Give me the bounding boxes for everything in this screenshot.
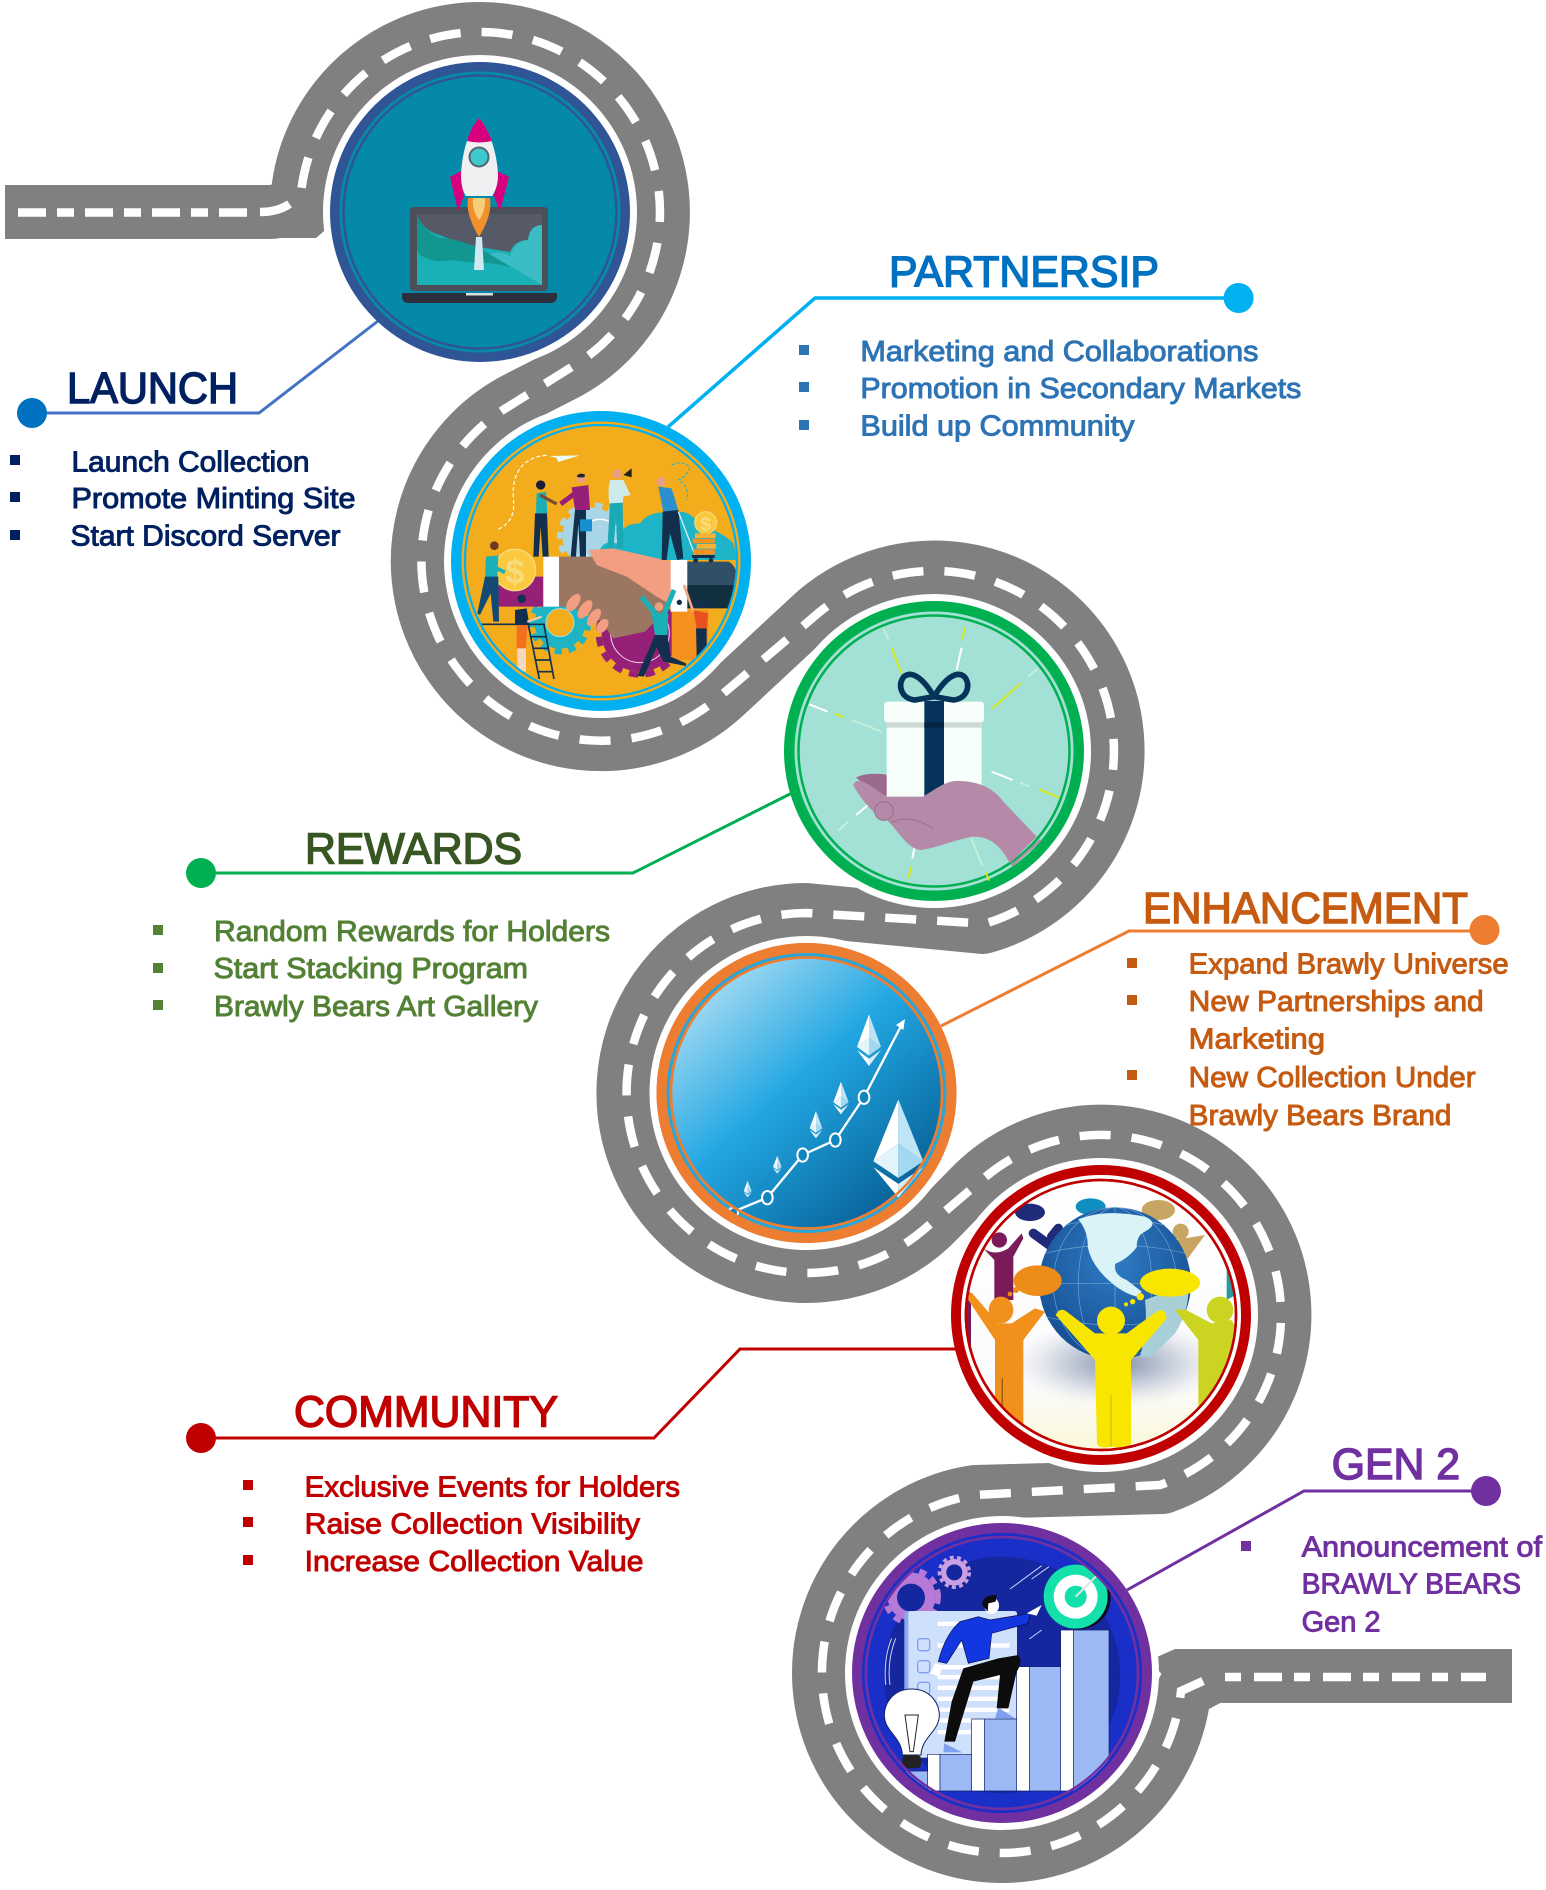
- back person tan: [1173, 1224, 1205, 1260]
- back person purple: [983, 1232, 1023, 1300]
- fingers: [566, 594, 608, 634]
- left coin: [494, 549, 536, 591]
- illustration: chart line and diamonds: [729, 1014, 923, 1217]
- marker dot: [186, 858, 216, 888]
- salmon hand: [588, 548, 672, 605]
- orange person: [965, 1293, 1045, 1427]
- connector line: rewards: [216, 793, 792, 873]
- chart line: [733, 1027, 901, 1212]
- illustration: gift and hand: [809, 627, 1059, 881]
- panel: gen 2: [1241, 1440, 1543, 1639]
- bars: [902, 1630, 1109, 1791]
- heading: gen 2: GEN 2: [1332, 1440, 1460, 1489]
- icon: rocket: [450, 118, 509, 270]
- hand: [853, 781, 1037, 863]
- heading: enhancement: ENHANCEMENT: [1143, 884, 1468, 933]
- bullet list: Build up Community: [860, 411, 1135, 443]
- document: [904, 1611, 1017, 1758]
- panel: enhancement: [1127, 884, 1509, 1132]
- panel: rewards: [153, 824, 610, 1023]
- cuffs: [543, 557, 687, 612]
- bullet list: Brawly Bears Brand: [1189, 1100, 1452, 1132]
- gear: light blue: [560, 505, 624, 569]
- bullet list: Launch Collection: [72, 446, 310, 478]
- bullet list: [243, 1472, 680, 1578]
- bullet list: BRAWLY BEARS: [1302, 1568, 1521, 1600]
- person: woman right: [684, 585, 708, 657]
- gift box: [884, 674, 984, 798]
- bullet list: Promote Minting Site: [72, 483, 356, 515]
- marker dot: [186, 1423, 216, 1453]
- connector line: gen 2: [1127, 1491, 1475, 1590]
- circle 6: climbing to target: [852, 1523, 1152, 1823]
- clouds: [600, 512, 738, 560]
- illustration: globe and people: [962, 1198, 1238, 1447]
- bullet list: Brawly Bears Art Gallery: [214, 991, 539, 1023]
- bullet list: Announcement of: [1302, 1532, 1543, 1564]
- bullet list: Gen 2: [1302, 1607, 1380, 1639]
- bullet list: New Partnerships and: [1189, 986, 1484, 1018]
- bullet list: Expand Brawly Universe: [1189, 948, 1509, 980]
- brown hand: [559, 557, 672, 638]
- rays: [809, 627, 1059, 881]
- circle 3: gift in hand: [784, 601, 1084, 901]
- gear: teal: [532, 595, 588, 651]
- target: [1044, 1565, 1111, 1629]
- lime person: [1175, 1297, 1238, 1407]
- bullet list: New Collection Under: [1189, 1062, 1476, 1094]
- bullet list: Raise Collection Visibility: [305, 1509, 641, 1541]
- bullet list: Exclusive Events for Holders: [305, 1472, 680, 1504]
- back bubbles: [1015, 1198, 1175, 1221]
- icon: laptop: [402, 207, 557, 303]
- person: man with briefcase: [561, 474, 592, 557]
- left sleeve: [496, 577, 543, 607]
- heading: partnersip: PARTNERSIP: [889, 248, 1159, 297]
- marker dot: [1470, 915, 1500, 945]
- bullet list: Start Discord Server: [70, 521, 341, 553]
- marker dot: [1224, 283, 1254, 313]
- bullet list: Increase Collection Value: [305, 1546, 644, 1578]
- globe: [1039, 1207, 1191, 1359]
- person: man with megaphone: [607, 468, 632, 548]
- right coin and cart: $: [700, 515, 711, 536]
- gear: purple: [596, 608, 672, 678]
- gears: [885, 1557, 969, 1623]
- heading: rewards: REWARDS: [305, 824, 522, 873]
- speech bubbles: [1008, 1265, 1200, 1306]
- connector line: partnership: [668, 298, 1225, 427]
- person: holding coin: [477, 541, 505, 622]
- bullet list: Start Stacking Program: [214, 953, 528, 985]
- bullet list: Promotion in Secondary Markets: [860, 373, 1301, 405]
- circle 1: rocket launch from laptop: [330, 62, 630, 362]
- circle 2: partnership handshake: [451, 411, 751, 711]
- floor shadow: [1026, 1334, 1198, 1400]
- paper plane: [549, 455, 580, 462]
- bullet list: [10, 446, 356, 553]
- heading: launch: LAUNCH: [67, 364, 238, 413]
- bullet list: [1241, 1532, 1543, 1639]
- right sleeve: [687, 562, 738, 608]
- marker dot: [1471, 1476, 1501, 1506]
- hand fingers: [856, 774, 888, 797]
- connector line: community: [216, 1349, 957, 1438]
- left coin: $: [505, 553, 525, 591]
- illustration: handshake scene: [476, 455, 738, 679]
- illustration: person on chart bars: [884, 1557, 1120, 1793]
- yellow person: [1056, 1307, 1167, 1447]
- panel: community: [186, 1388, 680, 1578]
- right coin and cart: [692, 512, 717, 563]
- bullet list: Random Rewards for Holders: [214, 916, 610, 948]
- decorative strokes: [885, 1566, 1049, 1685]
- ethereum gems: [873, 1099, 923, 1198]
- panel: partnership: [799, 248, 1301, 443]
- panel: launch: [10, 364, 356, 553]
- marker dot: [17, 398, 47, 428]
- back person navy: [1033, 1228, 1058, 1247]
- connector line: launch: [47, 321, 378, 413]
- circle 5: community around globe: [951, 1165, 1251, 1465]
- person: girl on ladder: [515, 594, 542, 672]
- person: man with phone: [656, 477, 695, 560]
- circle 4: rising ethereum chart: [656, 943, 957, 1243]
- person: [930, 1595, 1042, 1752]
- bullet list: [799, 336, 1301, 443]
- bullet list: [153, 916, 610, 1023]
- bullet list: Marketing and Collaborations: [860, 336, 1258, 368]
- person: kneeling man: [637, 590, 686, 677]
- bullet list: [1127, 948, 1509, 1132]
- person: woman shaking hands: [533, 480, 557, 557]
- boxes: [672, 610, 708, 660]
- bullet list: Marketing: [1189, 1024, 1325, 1056]
- platform and ladder: [476, 624, 554, 679]
- connector line: enhancement: [941, 931, 1472, 1026]
- heading: community: COMMUNITY: [294, 1388, 558, 1437]
- light bulb: [884, 1689, 939, 1768]
